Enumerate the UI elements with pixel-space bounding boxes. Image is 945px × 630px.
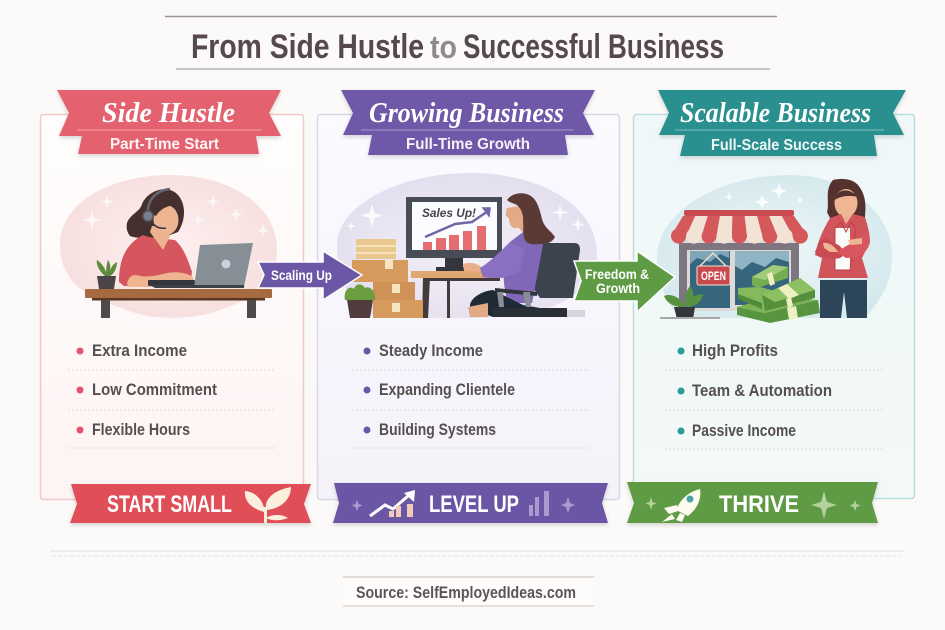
badge: level up: LEVEL UP — [429, 491, 519, 518]
panel: side hustle — [40, 114, 304, 500]
arrow: freedom and growth — [574, 251, 675, 312]
badge: level up — [333, 483, 608, 523]
list: growing business benefits: Building Systems — [379, 421, 496, 439]
list: growing business benefits: Steady Income — [379, 342, 483, 360]
arrow: scaling up: Scaling Up — [271, 267, 332, 283]
heading ribbon: growing business — [341, 90, 595, 155]
badge: thrive — [627, 482, 878, 523]
list: growing business benefits: Expanding Clientele — [379, 381, 515, 399]
heading ribbon: scalable business — [658, 90, 906, 156]
title — [165, 16, 777, 69]
list: scalable business benefits — [665, 342, 885, 449]
list: scalable business benefits: Team & Automation — [692, 382, 832, 400]
list: side hustle benefits — [68, 342, 276, 448]
heading ribbon: scalable business: Scalable Business — [680, 98, 871, 129]
list: side hustle benefits: Low Commitment — [92, 381, 217, 399]
illustration: woman at monitor with boxes: Sales Up! — [422, 206, 476, 220]
title: From Side Hustle — [191, 28, 424, 66]
illustration: woman at monitor with boxes — [337, 173, 597, 318]
figure: owner with crossed arms — [815, 179, 870, 318]
source credit — [343, 577, 594, 606]
list: side hustle benefits: Extra Income — [92, 342, 187, 360]
illustration: storefront, money and owner: OPEN — [701, 269, 726, 283]
badge: thrive: THRIVE — [719, 491, 799, 518]
icon: sprout — [245, 487, 291, 523]
panel: scalable business — [634, 114, 914, 498]
list: side hustle benefits: Flexible Hours — [92, 421, 190, 439]
heading ribbon: side hustle: Part-Time Start — [110, 136, 219, 153]
arrow: scaling up — [258, 251, 362, 300]
heading ribbon: growing business: Full-Time Growth — [406, 136, 530, 153]
list: scalable business benefits: Passive Income — [692, 422, 796, 440]
panel: growing business — [318, 114, 620, 500]
badge: start small: START SMALL — [107, 491, 232, 518]
icon: stacks of cash — [737, 265, 820, 323]
heading ribbon: side hustle — [57, 90, 281, 154]
list: scalable business benefits: High Profits — [692, 342, 778, 360]
heading ribbon: side hustle: Side Hustle — [102, 98, 235, 129]
icon: rising arrow and bars — [352, 490, 575, 517]
badge: start small — [70, 484, 311, 523]
title: Successful Business — [463, 28, 724, 66]
illustration: storefront, money and owner — [657, 175, 892, 323]
arrow: freedom and growth: Growth — [596, 280, 640, 296]
heading ribbon: scalable business: Full-Scale Success — [711, 137, 842, 154]
icon: rocket — [662, 489, 700, 522]
source credit: Source: SelfEmployedIdeas.com — [356, 583, 576, 602]
illustration: woman with laptop at desk — [60, 175, 277, 318]
title: to — [430, 29, 457, 65]
arrow: freedom and growth: Freedom & — [585, 266, 649, 282]
list: growing business benefits — [352, 342, 589, 448]
heading ribbon: growing business: Growing Business — [369, 98, 564, 129]
